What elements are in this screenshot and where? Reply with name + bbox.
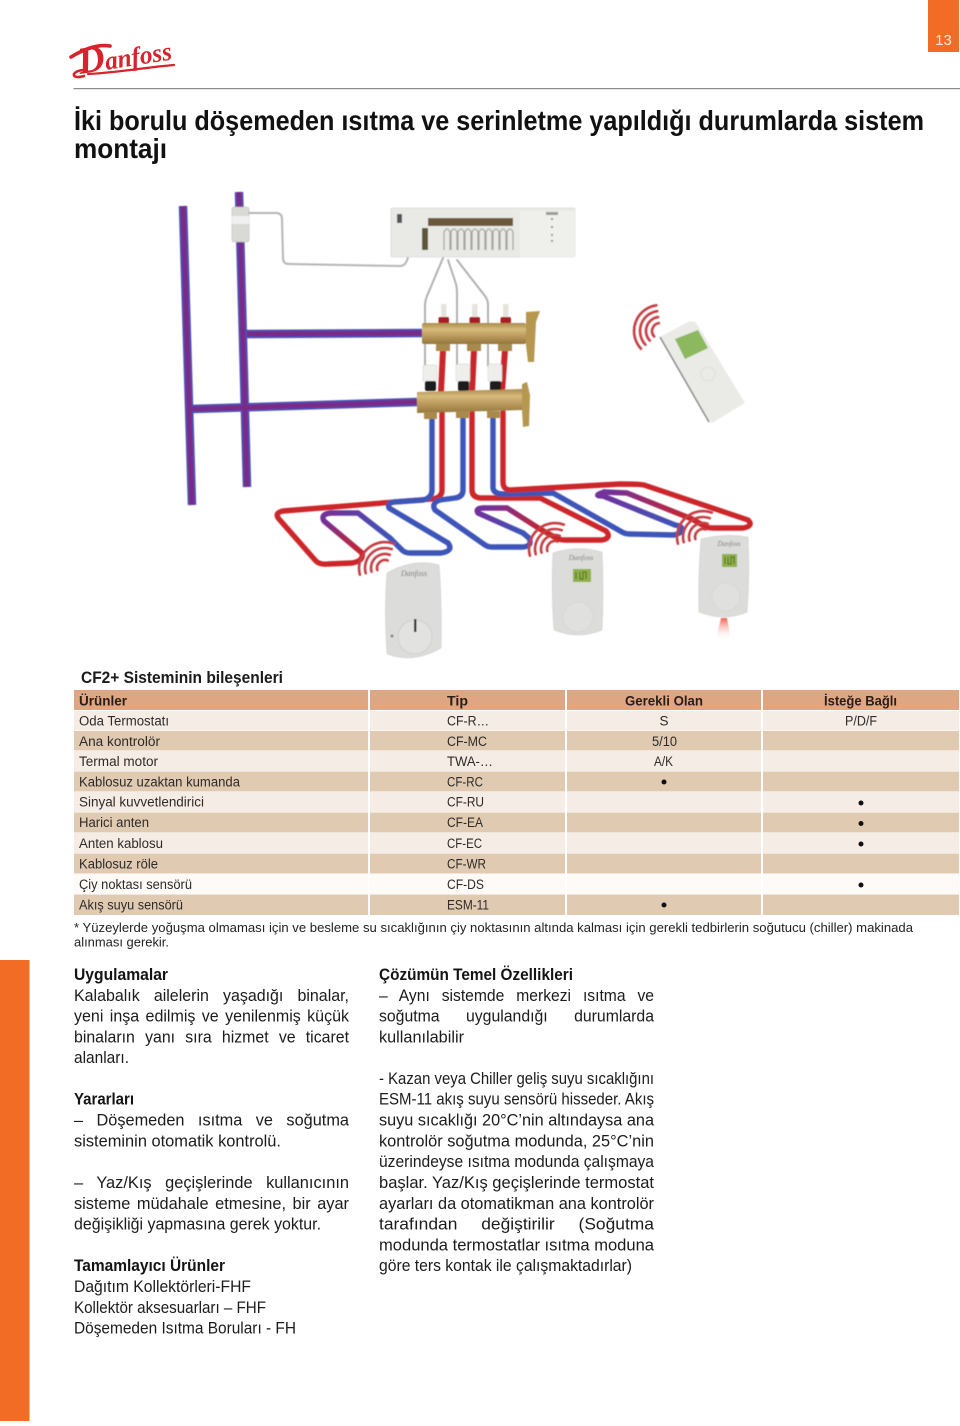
header row: Gerekli Olan xyxy=(625,694,703,708)
paragraph: Kazan veya Chiller: göre ters kontak ile çalışmaktadırlar) xyxy=(379,1257,632,1275)
footnote: * Yüzeylerde yoğuşma olmaması için ve besleme su sıcaklığının çiy noktasının altında kalması için gerekli tedbirlerin soğutucu (chiller) makinada xyxy=(74,920,914,935)
table heading: CF2+ Sisteminin bileşenleri xyxy=(81,669,283,687)
column: Ürünler: Harici anten xyxy=(79,815,149,830)
column: Ürünler: Anten kablosu xyxy=(79,836,163,851)
column: Ürünler xyxy=(79,714,240,912)
wireless signal right xyxy=(677,511,712,544)
column: Ürünler: Çiy noktası sensörü xyxy=(79,877,192,892)
thermostat with floor sensor: Danfoss xyxy=(717,540,741,548)
column: Gerekli Olan xyxy=(652,714,677,908)
column: İsteğe Bağlı xyxy=(845,714,877,888)
upper manifold with valves xyxy=(422,304,540,392)
thermostat with dial: Danfoss xyxy=(400,569,427,578)
section: Yararları: – Yaz/Kış geçişlerinde kullanıcının xyxy=(74,1174,349,1192)
section: Çözümün Temel Özellikleri: soğutma uygulandığı durumlarda xyxy=(379,1008,655,1026)
illustration: floor heating system diagram xyxy=(183,192,750,658)
column: Gerekli Olan: A/K xyxy=(654,754,673,769)
section: Çözümün Temel Özellikleri: kullanılabilir xyxy=(379,1028,464,1046)
wireless signal middle xyxy=(529,523,564,556)
wireless signal left xyxy=(359,542,394,575)
main controller xyxy=(391,208,575,257)
section: Yararları: – Döşemeden ısıtma ve soğutma xyxy=(74,1112,350,1130)
section: Tamamlayıcı Ürünler: Kollektör aksesuarları – FHF xyxy=(74,1299,266,1317)
section: Uygulamalar: yeni inşa edilmiş ve yenilenmiş küçük xyxy=(74,1008,350,1026)
thermostat with dial xyxy=(386,563,441,658)
header rule xyxy=(74,88,960,89)
page number tab: 13 xyxy=(935,32,952,49)
column: Tip: CF-EC xyxy=(447,836,482,851)
red loop left xyxy=(277,412,442,564)
column: Ürünler: Akış suyu sensörü xyxy=(79,898,183,912)
inner left purple xyxy=(323,513,362,553)
column: Tip: CF-DS xyxy=(447,877,484,892)
footnote: alınması gerekir. xyxy=(74,934,169,950)
paragraph: Kazan veya Chiller: tarafından değiştirilir (Soğutma xyxy=(379,1216,655,1234)
floor loop pipes xyxy=(277,412,750,564)
column: İsteğe Bağlı: P/D/F xyxy=(845,714,877,728)
table: CF2+ components xyxy=(74,690,959,915)
column: Tip: ESM-11 xyxy=(447,898,489,912)
section: Uygulamalar: Uygulamalar xyxy=(74,966,169,984)
column: Gerekli Olan: 5/10 xyxy=(652,734,677,749)
paragraph: Kazan veya Chiller: - Kazan veya Chiller geliş suyu sıcaklığını xyxy=(379,1070,654,1088)
column: Tip: CF-R… xyxy=(447,714,489,728)
section: Yararları: sisteminin otomatik kontrolü. xyxy=(74,1132,281,1150)
blue loop right xyxy=(493,418,682,535)
page number tab xyxy=(928,0,959,52)
section: Çözümün Temel Özellikleri: – Aynı sistemde merkezi ısıtma ve xyxy=(379,987,654,1005)
motor cables xyxy=(425,258,488,366)
section: Tamamlayıcı Ürünler: Tamamlayıcı Ürünler xyxy=(74,1256,226,1275)
footnote xyxy=(74,920,914,950)
paragraph: Kazan veya Chiller: ayarları da otomatikman ana kontrolör xyxy=(379,1195,654,1213)
paragraph: Kazan veya Chiller: modunda termostatlar ısıtma moduna xyxy=(379,1236,655,1254)
column: Ürünler: Oda Termostatı xyxy=(79,714,169,728)
section: Yararları: değişikliği yapmasına gerek yoktur. xyxy=(74,1216,321,1234)
header row: İsteğe Bağlı xyxy=(824,694,897,708)
thermal motors xyxy=(423,364,502,391)
red loop right xyxy=(503,412,750,528)
paragraph: Kazan veya Chiller xyxy=(379,1070,655,1275)
title xyxy=(74,105,924,164)
paragraph: Kazan veya Chiller: üzerindeyse ısıtma modunda çalışmaya xyxy=(379,1153,655,1171)
section: Tamamlayıcı Ürünler: Döşemeden Isıtma Boruları - FH xyxy=(74,1320,296,1338)
section: Uygulamalar xyxy=(74,966,350,1067)
thermostat with display: Danfoss xyxy=(568,553,593,562)
header row: Tip xyxy=(447,694,468,708)
row backgrounds xyxy=(74,711,959,915)
section: Yararları: sisteme müdahale etmesine, bir ayar xyxy=(74,1195,349,1213)
column: Ürünler: Sinyal kuvvetlendirici xyxy=(79,794,204,810)
section: Uygulamalar: binaların yanı sıra hizmet ve ticaret xyxy=(74,1028,349,1046)
column: Gerekli Olan: S xyxy=(659,714,669,728)
section: Yararları: Yararları xyxy=(74,1090,134,1108)
header row: Ürünler xyxy=(79,694,128,708)
column: Tip: CF-WR xyxy=(447,856,486,872)
column: Ürünler: Kablosuz uzaktan kumanda xyxy=(79,774,240,790)
purple supply pipes xyxy=(183,192,422,505)
column: Ürünler: Ana kontrolör xyxy=(79,734,161,749)
wireless signal remote xyxy=(625,304,671,349)
section: Çözümün Temel Özellikleri xyxy=(379,965,655,1046)
paragraph: Kazan veya Chiller: suyu sıcaklığı 20°C’nin altındaysa ana xyxy=(379,1112,655,1130)
sensor wire xyxy=(249,213,408,266)
column: Ürünler: Termal motor xyxy=(79,754,159,769)
red loop middle xyxy=(472,412,608,540)
flow sensor xyxy=(232,207,249,242)
logo: Danfoss: Danfoss xyxy=(74,27,174,83)
section: Uygulamalar: alanları. xyxy=(74,1049,129,1067)
column: Tip: CF-RU xyxy=(447,794,484,810)
column: Tip: CF-EA xyxy=(447,815,483,830)
orange side rail xyxy=(0,960,30,1421)
title: montajı xyxy=(74,133,167,164)
section: Yararları xyxy=(74,1090,350,1234)
paragraph: Kazan veya Chiller: başlar. Yaz/Kış geçişlerinde termostat xyxy=(379,1174,654,1192)
blue loop middle xyxy=(434,418,530,547)
thermostat with display xyxy=(552,549,603,635)
column: Tip: TWA-… xyxy=(447,754,493,769)
thermostat with floor sensor xyxy=(699,535,749,640)
right text column xyxy=(379,965,655,1275)
section: Çözümün Temel Özellikleri: Çözümün Temel Özellikleri xyxy=(379,965,573,984)
column: Tip: CF-MC xyxy=(447,734,487,749)
column: Ürünler: Kablosuz röle xyxy=(79,856,158,872)
column: Tip: CF-RC xyxy=(447,774,483,790)
section: Tamamlayıcı Ürünler: Dağıtım Kollektörleri-FHF xyxy=(74,1278,251,1296)
blue loop left xyxy=(389,418,450,553)
section: Uygulamalar: Kalabalık ailelerin yaşadığı binalar, xyxy=(74,987,349,1005)
column: Tip xyxy=(447,714,493,912)
section: Tamamlayıcı Ürünler xyxy=(74,1256,296,1338)
header row xyxy=(74,690,959,710)
wireless remote control xyxy=(660,321,745,423)
paragraph: Kazan veya Chiller: ESM-11 akış suyu sensörü hisseder. Akış xyxy=(379,1090,654,1108)
paragraph: Kazan veya Chiller: kontrolör soğutma modunda, 25°C’nin xyxy=(379,1132,654,1150)
lower manifold xyxy=(417,382,530,427)
left text column xyxy=(74,966,350,1338)
